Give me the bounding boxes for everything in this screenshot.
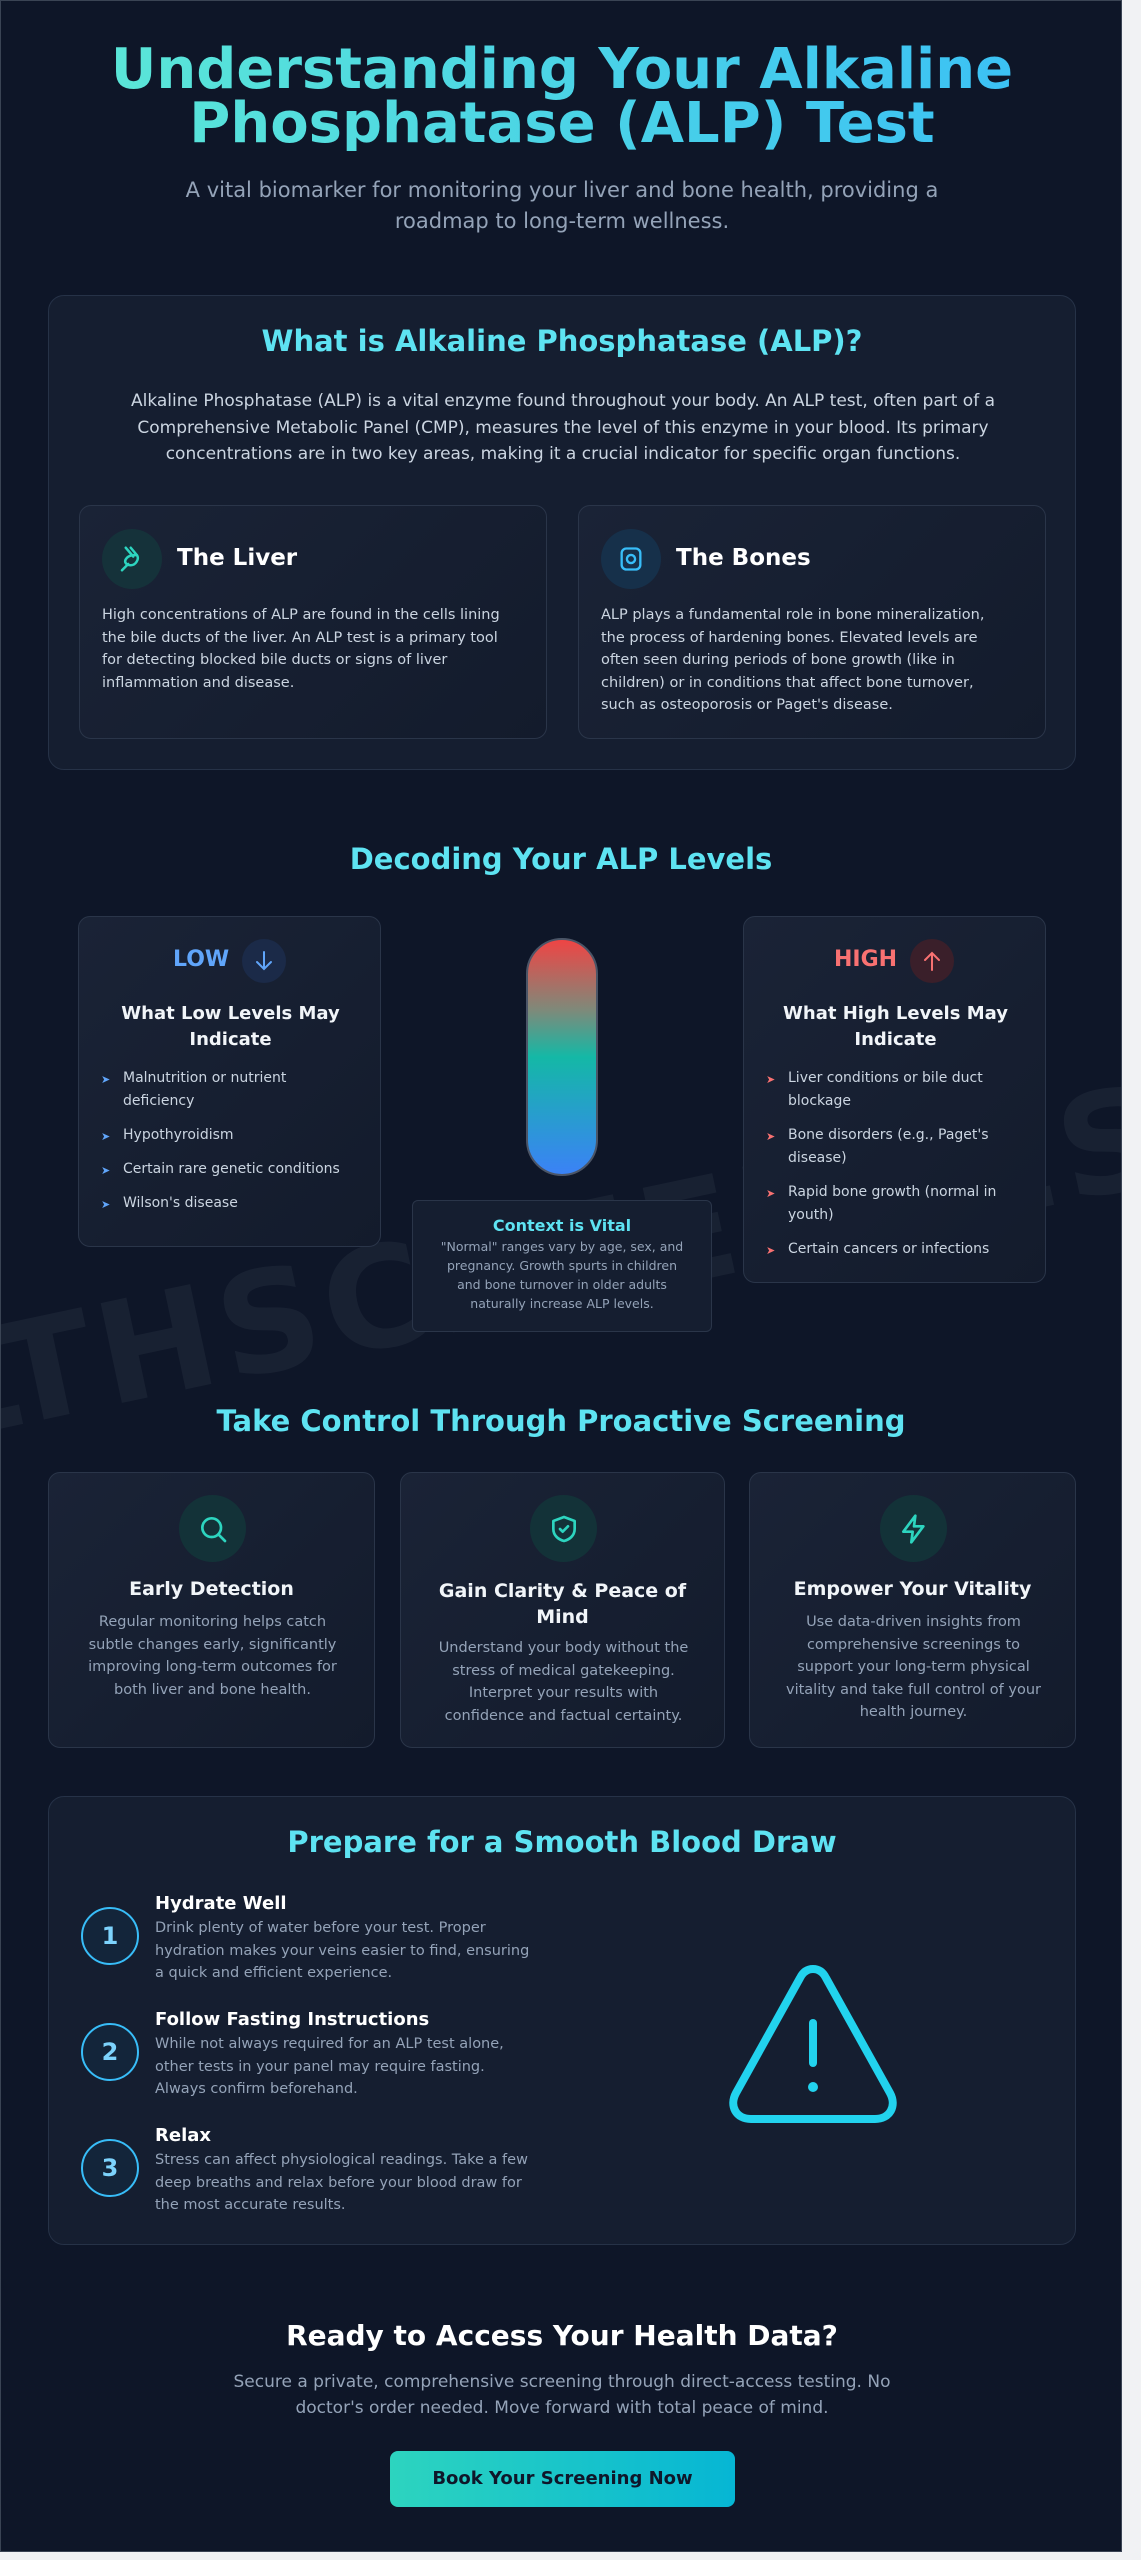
list: high: Liver conditions or bile duct <box>788 1070 983 1086</box>
text: bones <box>601 607 984 713</box>
card: gain clarity: Gain Clarity & Peace of <box>439 1580 686 1602</box>
step 2: other tests in your panel may require fasting. <box>155 2058 485 2074</box>
step 3: deep breaths and relax before your blood draw for <box>155 2174 522 2190</box>
step 3 <box>81 2125 528 2213</box>
heading: high <box>783 1003 1008 1050</box>
icon: liver <box>102 529 162 589</box>
card: the liver <box>79 505 547 739</box>
text: bones: ALP plays a fundamental role in bone mineralization, <box>601 607 984 623</box>
subtitle: A vital biomarker for monitoring your liver and bone health, providing a <box>186 178 938 202</box>
list: low: Certain rare genetic conditions <box>123 1161 340 1177</box>
text: bones: such as osteoporosis or Paget's disease. <box>601 697 893 713</box>
list: high: Bone disorders (e.g., Paget's <box>788 1127 989 1143</box>
text: bones: often seen during periods of bone growth (like in <box>601 652 955 668</box>
card: empower vitality: Use data-driven insights from comprehensive screenings to support your long-term physical vitality and take full control of your health journey. <box>786 1614 1041 1720</box>
callout: context is vital: "Normal" ranges vary by age, sex, and <box>441 1239 683 1254</box>
card: early detection: Regular monitoring helps catch subtle changes early, significantly improving long-term outcomes for both liver and bone health. <box>88 1614 337 1698</box>
intro text: Alkaline Phosphatase (ALP) is a vital enzyme found throughout your body. An ALP test, often part of a <box>131 391 995 411</box>
intro text: concentrations are in two key areas, making it a crucial indicator for specific organ functions. <box>166 444 960 464</box>
heading: low <box>121 1003 340 1050</box>
icon: search <box>179 1495 246 1562</box>
button: book screening: Book Your Screening Now <box>432 2468 693 2489</box>
step 1: 1 <box>102 1922 118 1950</box>
card: empower vitality: Empower Your Vitality <box>794 1578 1031 1600</box>
card: gain clarity: Understand your body without the stress of medical gatekeeping. Interpret your results with confidence and factual certainty. <box>439 1640 688 1724</box>
CTA text: doctor's order needed. Move forward with total peace of mind. <box>295 2398 829 2418</box>
label: LOW: LOW <box>173 947 229 972</box>
card: early detection: Early Detection <box>129 1578 294 1600</box>
list: high <box>767 1070 996 1257</box>
heading: high: What High Levels May <box>783 1003 1008 1024</box>
list: low: Hypothyroidism <box>123 1127 234 1143</box>
list: low <box>102 1070 340 1211</box>
heading: low: Indicate <box>189 1029 272 1050</box>
intro text: Comprehensive Metabolic Panel (CMP), measures the level of this enzyme in your blood. Its primary <box>137 418 989 438</box>
label: HIGH: HIGH <box>834 947 897 972</box>
title: Understanding Your Alkaline <box>111 37 1013 102</box>
list: high: youth) <box>788 1207 834 1223</box>
button: book screening <box>390 2451 735 2507</box>
panel: what is ALP <box>48 295 1076 770</box>
subtitle <box>186 178 938 233</box>
step 1: a quick and efficient experience. <box>155 1965 392 1981</box>
list: low: deficiency <box>123 1093 194 1109</box>
step 1 <box>81 1893 529 1981</box>
card: the bones <box>578 505 1046 739</box>
card: gain clarity <box>400 1472 725 1748</box>
list: high: disease) <box>788 1150 847 1166</box>
icon: up arrow <box>910 939 954 983</box>
step 2: While not always required for an ALP test alone, <box>155 2036 504 2052</box>
card: high levels <box>743 916 1046 1283</box>
intro text <box>131 391 995 464</box>
step 1: hydration makes your veins easier to find, ensuring <box>155 1942 529 1958</box>
list: high: Certain cancers or infections <box>788 1241 989 1257</box>
heading: high: Indicate <box>854 1029 937 1050</box>
callout: context is vital: pregnancy. Growth spurts in children <box>447 1258 677 1273</box>
heading: decoding: Decoding Your ALP Levels <box>350 842 772 876</box>
step 1: Drink plenty of water before your test. Proper <box>155 1920 486 1936</box>
list: low: Malnutrition or nutrient <box>123 1070 286 1086</box>
card: empower vitality <box>749 1472 1076 1748</box>
icon: warning triangle <box>729 1965 897 2123</box>
title: Phosphatase (ALP) Test <box>189 91 935 156</box>
step 3: Stress can affect physiological readings. Take a few <box>155 2152 528 2168</box>
heading: take control: Take Control Through Proactive Screening <box>216 1404 906 1438</box>
heading: the bones: The Bones <box>676 545 811 571</box>
callout: context is vital: naturally increase ALP levels. <box>470 1296 654 1311</box>
callout: context is vital <box>412 1200 712 1332</box>
list: low: Wilson's disease <box>123 1195 238 1211</box>
step 2: Always confirm beforehand. <box>155 2081 358 2097</box>
card: gain clarity: Mind <box>536 1606 589 1628</box>
icon: down arrow <box>242 939 286 983</box>
heading: prepare: Prepare for a Smooth Blood Draw <box>287 1825 837 1859</box>
card: early detection <box>48 1472 375 1748</box>
heading: CTA: Ready to Access Your Health Data? <box>286 2319 838 2352</box>
CTA text <box>234 2372 890 2418</box>
step 1: Hydrate Well <box>155 1893 287 1914</box>
step 2 <box>81 2009 504 2097</box>
step 3: Relax <box>155 2125 211 2146</box>
callout: context is vital: and bone turnover in older adults <box>457 1277 667 1292</box>
text: liver: High concentrations of ALP are found in the cells lining the bile ducts of the liver. An ALP test is a primary tool for detecting blocked bile ducts or signs of liver inflammation and disease. <box>102 607 500 690</box>
list: high: blockage <box>788 1093 851 1109</box>
title <box>1 43 1123 151</box>
callout: context is vital: Context is Vital <box>493 1216 631 1235</box>
text: bones: children) or in conditions that affect bone turnover, <box>601 674 974 690</box>
step 3: 3 <box>102 2154 118 2182</box>
card: low levels <box>78 916 381 1247</box>
heading: low: What Low Levels May <box>121 1003 340 1024</box>
subtitle: roadmap to long-term wellness. <box>395 209 729 233</box>
step 2: Follow Fasting Instructions <box>155 2009 429 2030</box>
panel: prepare <box>48 1796 1076 2245</box>
icon: bones <box>601 529 661 589</box>
heading: the liver: The Liver <box>177 545 297 571</box>
gauge: gradient pill <box>526 938 598 1176</box>
icon: shield <box>530 1495 597 1562</box>
step 2: 2 <box>102 2038 118 2066</box>
icon: lightning <box>880 1495 947 1562</box>
heading: what is ALP: What is Alkaline Phosphatase (ALP)? <box>261 324 862 358</box>
CTA text: Secure a private, comprehensive screening through direct-access testing. No <box>234 2372 890 2392</box>
list: high: Rapid bone growth (normal in <box>788 1184 996 1200</box>
text: bones: the process of hardening bones. Elevated levels are <box>601 630 978 646</box>
step 3: the most accurate results. <box>155 2197 346 2213</box>
